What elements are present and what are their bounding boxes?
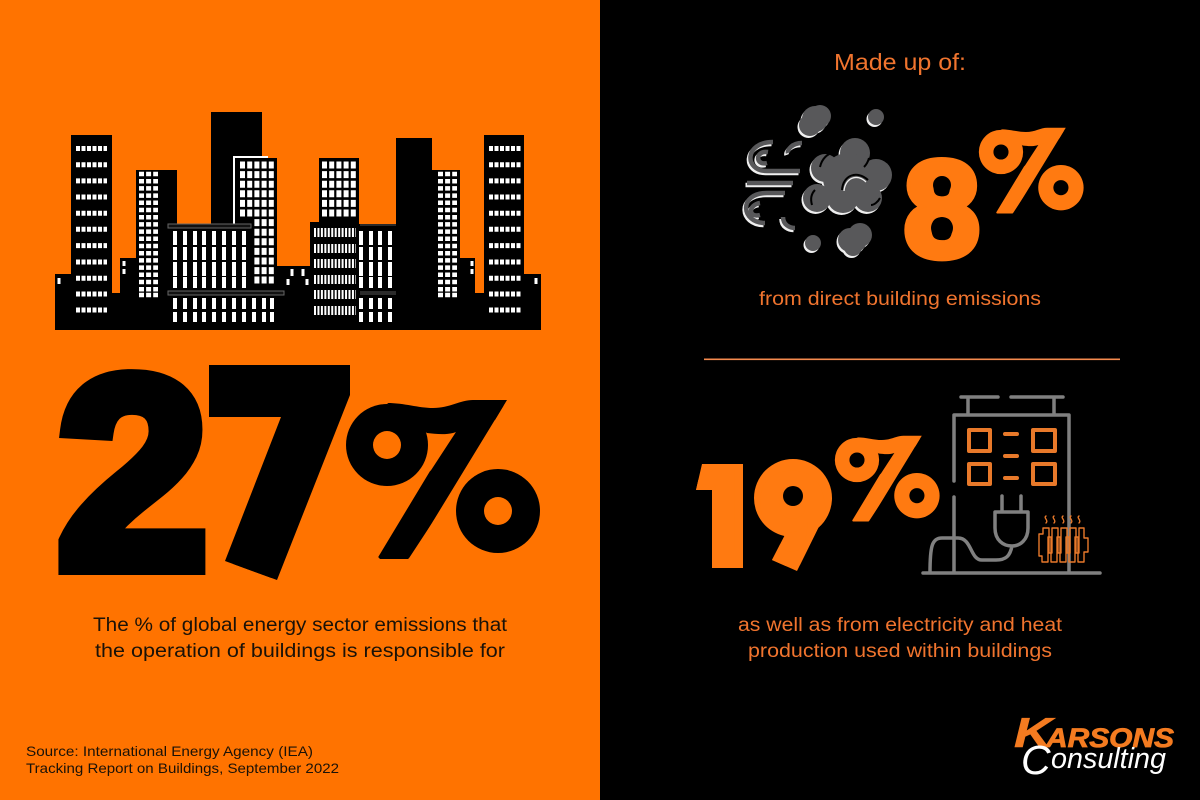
caption: electricity and heat [738, 615, 1063, 662]
front left building windows [175, 231, 244, 288]
icon: building with plug and radiator [923, 397, 1100, 573]
big number: 8% [904, 128, 1084, 262]
logo: Karsons Consulting: onsulting [1051, 743, 1166, 775]
description: left: the operation of buildings is responsible for [95, 641, 506, 662]
caption: electricity and heat: as well as from electricity and heat [738, 615, 1063, 636]
percent sign: % [980, 109, 1080, 235]
percent sign: % [836, 417, 936, 543]
digit 1: 1 [682, 438, 761, 597]
source note [26, 743, 339, 776]
caption: electricity and heat: production used within buildings [748, 641, 1052, 662]
right tower windows [489, 148, 521, 310]
centre left tower upper windows [240, 165, 276, 213]
logo: Karsons Consulting [1014, 709, 1174, 783]
big number: 19% [696, 436, 940, 571]
description: left: The % of global energy sector emissions that [93, 615, 508, 636]
heading: made up of: Made up of: [834, 49, 966, 75]
logo: Karsons Consulting: K [1014, 709, 1055, 756]
percent sign: % [348, 364, 535, 599]
second right tower windows [438, 174, 457, 295]
percent rings [979, 128, 1084, 210]
source note: Source: International Energy Agency (IEA) [26, 743, 313, 759]
front left lower windows [175, 298, 272, 322]
digit 8: 8 [904, 133, 980, 285]
front right building windows [361, 231, 390, 322]
centre right tower windows [322, 165, 358, 213]
icon: city skyline [55, 112, 541, 330]
percent rings [835, 436, 940, 518]
building ledges [168, 224, 284, 295]
counters of 8 [931, 176, 953, 239]
left tower windows [76, 148, 107, 310]
white roofline [234, 157, 268, 224]
right block thin windows [314, 232, 356, 310]
source note: Tracking Report on Buildings, September 2022 [26, 760, 339, 776]
centre left tower lower windows [254, 223, 276, 280]
percent rings [346, 400, 540, 553]
caption: direct emissions: from direct building emissions [759, 289, 1041, 310]
small scattered windows [59, 261, 536, 285]
digit 2: 2 [57, 321, 208, 625]
logo: Karsons Consulting: C [1021, 737, 1051, 783]
big number: 27% [58, 365, 540, 580]
description: left [93, 615, 508, 662]
icon: smoke and wind [745, 105, 892, 258]
logo: Karsons Consulting: ARSONS [1045, 723, 1174, 753]
counter of 9 [783, 486, 803, 506]
digit 9: 9 [756, 443, 831, 594]
second tower windows [139, 174, 158, 295]
digit 7: 7 [190, 306, 357, 642]
panel: black right background [600, 0, 1200, 800]
divider [704, 358, 1120, 360]
panel: orange left background [0, 0, 600, 800]
